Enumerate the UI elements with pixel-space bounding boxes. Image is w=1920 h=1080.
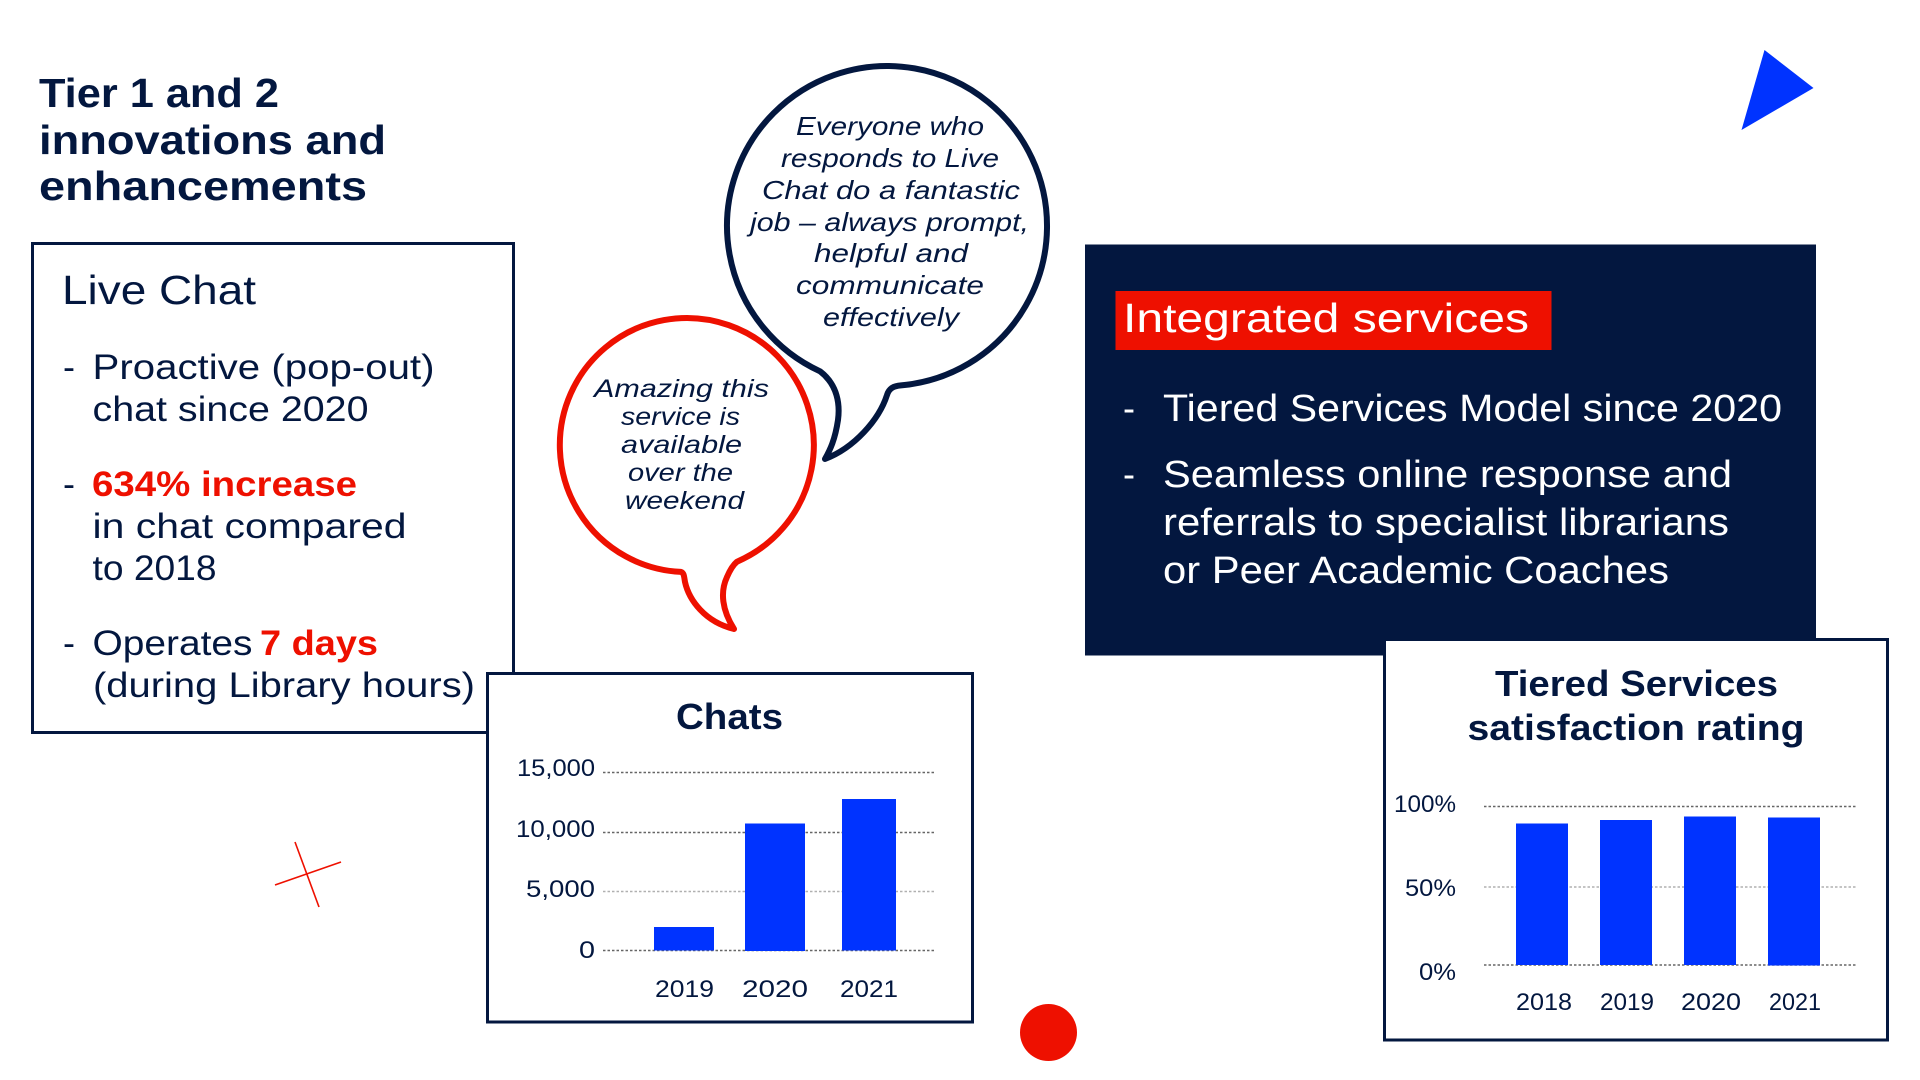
panel: Live Chat — [32, 244, 514, 732]
bullet: seamless online response: Seamless online response and — [1163, 454, 1732, 496]
bar chart: satisfaction rating: 50% — [1405, 875, 1456, 902]
panel: Chats chart — [488, 674, 972, 1022]
speech bubble: weekend service — [560, 318, 814, 629]
heading: Tiered Services satisfaction rating: Tiered Services — [1495, 663, 1778, 704]
bullet: 634% increase: 634% increase — [92, 465, 357, 504]
bar chart: satisfaction rating: 100% — [1394, 791, 1456, 818]
heading: Live Chat: Live Chat — [62, 267, 257, 313]
bullet: tiered services model: - — [1123, 388, 1135, 430]
heading: Integrated services: Integrated services — [1123, 295, 1529, 341]
icon: red circle — [1020, 1004, 1077, 1061]
bullet: proactive chat: - — [63, 348, 75, 387]
title: enhancements — [39, 163, 367, 209]
bar chart: Chats: 2021 — [840, 976, 898, 1003]
bullet: 634% increase — [63, 465, 406, 588]
bar chart: satisfaction rating: 2018 — [1516, 989, 1572, 1016]
bullet: seamless online response: referrals to specialist librarians — [1163, 502, 1729, 544]
bar chart: Chats: 2019 — [655, 976, 714, 1003]
quote text: staff praise: communicate — [796, 270, 984, 300]
quote text: weekend service: service is — [621, 403, 740, 431]
bar chart: Chats: 15,000 — [517, 755, 595, 782]
heading: Integrated services — [1116, 291, 1552, 350]
quote text: staff praise: Everyone who — [796, 111, 984, 141]
bullet: seamless online response: or Peer Academic Coaches — [1163, 550, 1669, 592]
bar chart: Chats: 2020 — [742, 976, 808, 1003]
quote text: weekend service: over the — [628, 459, 733, 487]
bullet: operates 7 days: Operates — [92, 624, 252, 663]
bullet: proactive chat: chat since 2020 — [92, 390, 368, 429]
quote text: staff praise: job – always prompt, — [746, 207, 1029, 237]
bullet: tiered services model: Tiered Services Model since 2020 — [1163, 388, 1782, 430]
bar chart: Chats: 0 — [579, 937, 595, 964]
bar chart: Chats: 10,000 — [516, 816, 595, 843]
quote text: staff praise: responds to Live — [781, 143, 999, 173]
bullet: operates 7 days: 7 days — [260, 624, 378, 663]
quote text: weekend service — [592, 375, 769, 515]
bar chart: satisfaction rating: 2020 — [1681, 989, 1741, 1016]
bar chart: satisfaction rating: 2021 — [1769, 989, 1821, 1016]
bar chart: satisfaction rating — [1394, 791, 1857, 1016]
bullet: seamless online response: - — [1123, 454, 1135, 496]
bar chart: satisfaction rating: 0% — [1419, 959, 1456, 986]
panel: Tiered Services satisfaction chart — [1384, 640, 1888, 1040]
bullet: operates 7 days: - — [63, 624, 75, 663]
bullet: 634% increase: to 2018 — [92, 549, 216, 588]
heading: Tiered Services satisfaction rating: satisfaction rating — [1468, 707, 1804, 748]
title: Tier 1 and 2 — [39, 70, 279, 116]
icon: blue triangle — [1742, 50, 1814, 130]
bullet: seamless online response — [1123, 454, 1732, 592]
quote text: weekend service: weekend — [625, 487, 745, 515]
quote text: staff praise: effectively — [823, 302, 961, 332]
bullet: 634% increase: - — [63, 465, 75, 504]
quote text: weekend service: Amazing this — [592, 375, 769, 403]
quote text: weekend service: available — [621, 431, 742, 459]
title: innovations and — [39, 117, 386, 163]
quote text: staff praise: Chat do a fantastic — [762, 175, 1020, 205]
title — [39, 70, 386, 209]
bullet: proactive chat: Proactive (pop-out) — [92, 348, 434, 387]
quote text: staff praise — [746, 111, 1029, 332]
icon: red cross — [275, 842, 341, 907]
speech bubble: staff praise — [727, 66, 1047, 459]
bullet: operates 7 days: (during Library hours) — [93, 666, 475, 705]
bullet: 634% increase: in chat compared — [92, 507, 406, 546]
bullet: operates 7 days — [63, 624, 475, 705]
bar chart: Chats — [516, 755, 936, 1003]
bar chart: satisfaction rating: 2019 — [1600, 989, 1654, 1016]
quote text: staff praise: helpful and — [814, 238, 970, 268]
bullet: proactive chat — [63, 348, 434, 429]
bar chart: Chats: 5,000 — [526, 876, 595, 903]
heading: Tiered Services satisfaction rating — [1468, 663, 1804, 748]
panel: Integrated services — [1085, 244, 1816, 656]
heading: Chats: Chats — [676, 696, 783, 737]
